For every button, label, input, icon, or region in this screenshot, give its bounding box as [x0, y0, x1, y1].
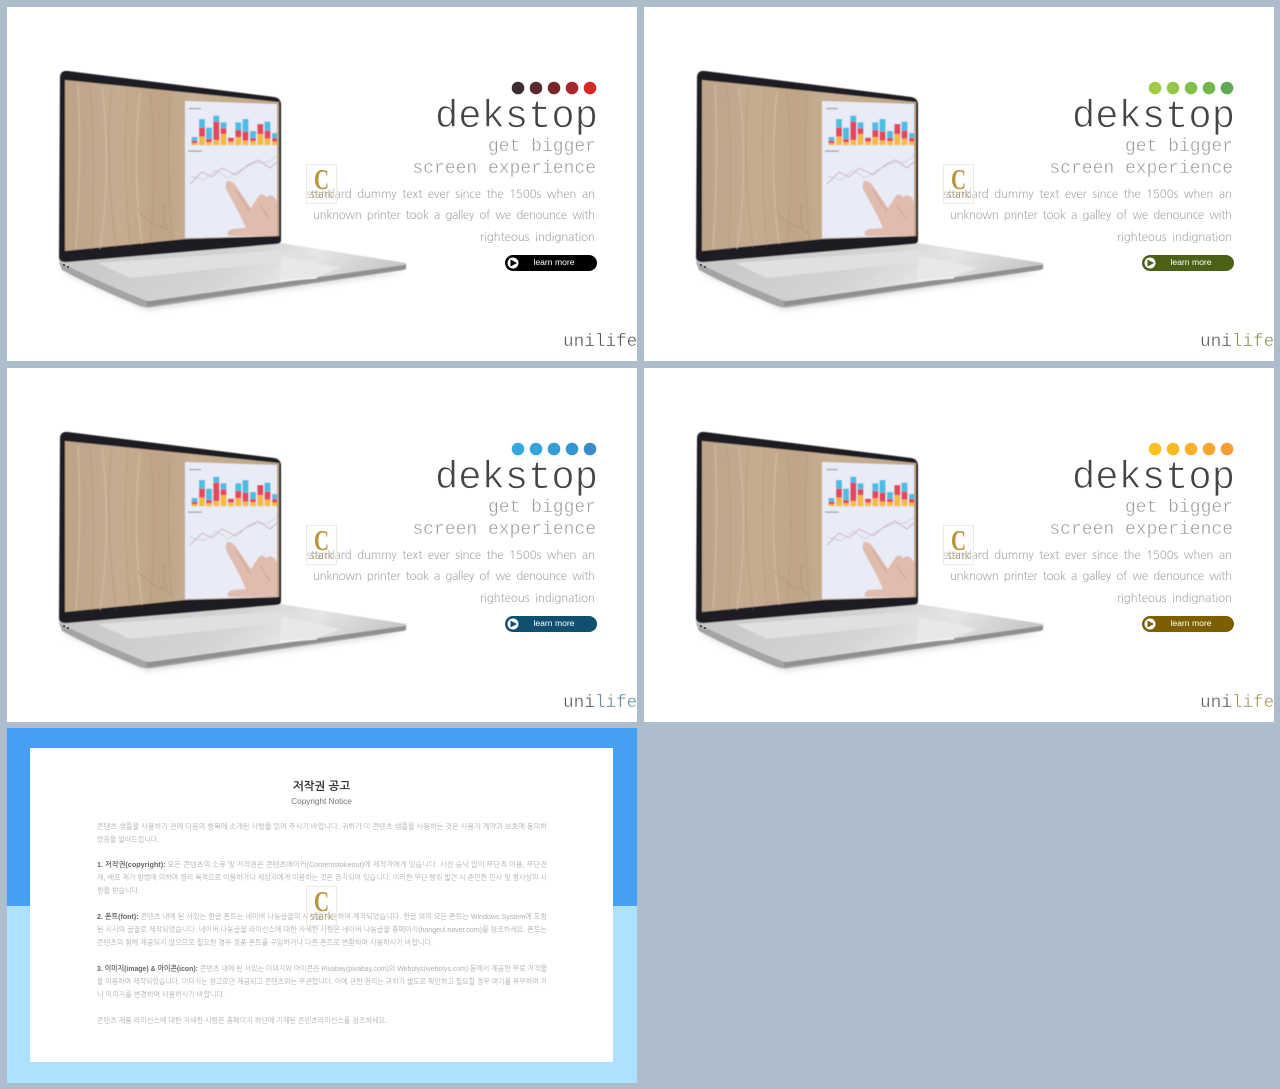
- copyright paragraph: 재, 배포 재가 방법에 의하여 영리 목적으로 이용하거나 제삼자에게 이용하는 것은 금지되어 있습니다. 이러한 무단 행위 발견 시 준민한 민사 및 형사상의 사: [97, 873, 548, 882]
- watermark logo: C: [314, 525, 329, 557]
- subheading: [1049, 498, 1233, 540]
- subheading: screen experience: [412, 159, 596, 179]
- font paragraph: [97, 912, 548, 947]
- intro paragraph: 콘텐츠 샘플을 사용하기 전에 다음의 항목에 소개된 사항을 읽어 주시기 바랍니다. 귀하가 이 콘텐츠 샘플을 사용하는 것은 사용자 계약과 보호에 동의하: [97, 822, 548, 831]
- copyright paragraph: 1. 저작권(copyright): 모든 콘텐츠의 소유 및 저작권은 콘텐츠메이커(Contentstokeout)에 제작자에게 있습니다. 사전 승낙 없이 무단적 이용, 무단전: [97, 860, 547, 869]
- intro paragraph: [97, 822, 548, 844]
- laptop mockup: [696, 71, 1043, 310]
- body text: unknown printer took a galley of we denounce with: [950, 570, 1232, 582]
- watermark logo: stark: [947, 550, 971, 561]
- button: learn more: [1170, 257, 1212, 267]
- copyright paragraph: [97, 860, 548, 895]
- colour dots: [512, 82, 596, 94]
- watermark logo: [306, 525, 336, 564]
- heading: dekstop: [1072, 95, 1235, 139]
- laptop mockup: [59, 71, 406, 310]
- heading: dekstop: [1072, 456, 1235, 500]
- body text: [943, 188, 1232, 243]
- notice title: 저작권 공고: [293, 780, 350, 792]
- laptop mockup: [59, 432, 406, 671]
- panel: dekstop amber: [644, 368, 1274, 722]
- heading: dekstop: [435, 456, 598, 500]
- copyright paragraph: 항을 받습니다.: [97, 886, 140, 895]
- body text: [306, 188, 595, 243]
- panel: copyright notice: [7, 728, 637, 1083]
- laptop mockup: [696, 432, 1043, 671]
- watermark logo: C: [951, 525, 966, 557]
- subheading: screen experience: [1049, 520, 1233, 540]
- button: learn more: [533, 618, 575, 628]
- button: learn more: [533, 257, 575, 267]
- subheading: get bigger: [1125, 498, 1233, 518]
- body text: righteous indignation: [1117, 592, 1232, 604]
- button: [505, 255, 597, 271]
- button: [505, 616, 597, 632]
- subheading: [412, 137, 596, 179]
- subheading: [412, 498, 596, 540]
- panel: dekstop blue: [7, 368, 637, 722]
- watermark logo: C: [314, 886, 329, 918]
- subheading: get bigger: [488, 498, 596, 518]
- body text: [943, 549, 1232, 604]
- watermark logo: [944, 164, 974, 204]
- body text: righteous indignation: [1117, 231, 1232, 243]
- image and icon paragraph: 을 이용하여 제작되었습니다. 이미지는 참고로만 제공되고 콘텐츠와는 무관합니다. 이에 관한 권리는 귀하가 별도로 확인하고 필요할 경우 여기를 유무하여 거: [97, 977, 547, 986]
- heading: dekstop: [435, 95, 598, 139]
- notice subtitle: Copyright Notice: [291, 797, 352, 806]
- licence line: 콘텐츠 제품 라이선스에 대한 자세한 사항은 홈페이지 하단에 기재된 콘텐츠라이선스를 참조하세요.: [97, 1016, 387, 1025]
- subheading: screen experience: [412, 520, 596, 540]
- watermark logo: [944, 525, 974, 564]
- image and icon paragraph: 3. 이미지(image) & 아이콘(icon): 콘텐츠 내에 된 서있는 이미지와 아이콘은 Pixabay(pixabay.com)와 Webolys(webolys.com) 등에서 제공한 무료 저작물: [97, 964, 547, 973]
- subheading: get bigger: [1125, 137, 1233, 157]
- colour dots: [512, 443, 596, 455]
- body text: standard dummy text ever since the 1500s when an: [943, 549, 1232, 561]
- font paragraph: 2. 폰트(font): 콘텐츠 내에 된 서있는 한글 폰트는 네이버 나눔글꼴의 서체를 사용하여 제작되었습니다. 한글 외의 모든 폰트는 Windows System에 포함: [97, 912, 548, 921]
- image and icon paragraph: 나 이미지를 변경하여 사용하시기 바랍니다.: [97, 990, 225, 999]
- body text: standard dummy text ever since the 1500s when an: [306, 549, 595, 561]
- body text: righteous indignation: [480, 231, 595, 243]
- body text: unknown printer took a galley of we denounce with: [313, 209, 595, 221]
- colour dots: [1149, 443, 1233, 455]
- subheading: screen experience: [1049, 159, 1233, 179]
- colour dots: [1149, 82, 1233, 94]
- subheading: [1049, 137, 1233, 179]
- body text: standard dummy text ever since the 1500s when an: [306, 188, 595, 200]
- brand: unilife: [1200, 693, 1274, 713]
- body text: unknown printer took a galley of we denounce with: [950, 209, 1232, 221]
- font paragraph: 된 시사의 글꼴로 제작되었습니다. 네이버 나눔글꼴 라이선스에 대한 자세한 사항은 네이버 나눔글꼴 홈페이지(hangeul.naver.com)를 참조하세요. 폰트는: [97, 925, 547, 934]
- font paragraph: 콘텐츠의 함께 제공되지 않으므로 필요한 경우 정품 폰트를 구입하거나 다른 폰트로 변환하여 사용하시기 바랍니다.: [97, 938, 433, 947]
- panel: dekstop maroon: [7, 7, 637, 361]
- button: [1142, 616, 1234, 632]
- body text: righteous indignation: [480, 592, 595, 604]
- body text: [306, 549, 595, 604]
- button: learn more: [1170, 618, 1212, 628]
- watermark logo: stark: [310, 550, 334, 561]
- panel: dekstop green: [644, 7, 1274, 361]
- button: [1142, 255, 1234, 271]
- body text: unknown printer took a galley of we denounce with: [313, 570, 595, 582]
- watermark logo: C: [314, 164, 329, 196]
- watermark logo: stark: [310, 189, 334, 200]
- intro paragraph: 였음을 알려드립니다.: [97, 835, 159, 844]
- brand: unilife: [563, 693, 637, 713]
- watermark logo: stark: [947, 189, 971, 200]
- subheading: get bigger: [488, 137, 596, 157]
- watermark logo: [306, 164, 336, 204]
- watermark logo: stark: [310, 911, 334, 922]
- body text: standard dummy text ever since the 1500s when an: [943, 188, 1232, 200]
- brand: unilife: [563, 332, 637, 352]
- watermark logo: [306, 886, 336, 926]
- brand: unilife: [1200, 332, 1274, 352]
- image and icon paragraph: [97, 964, 547, 999]
- watermark logo: C: [951, 164, 966, 196]
